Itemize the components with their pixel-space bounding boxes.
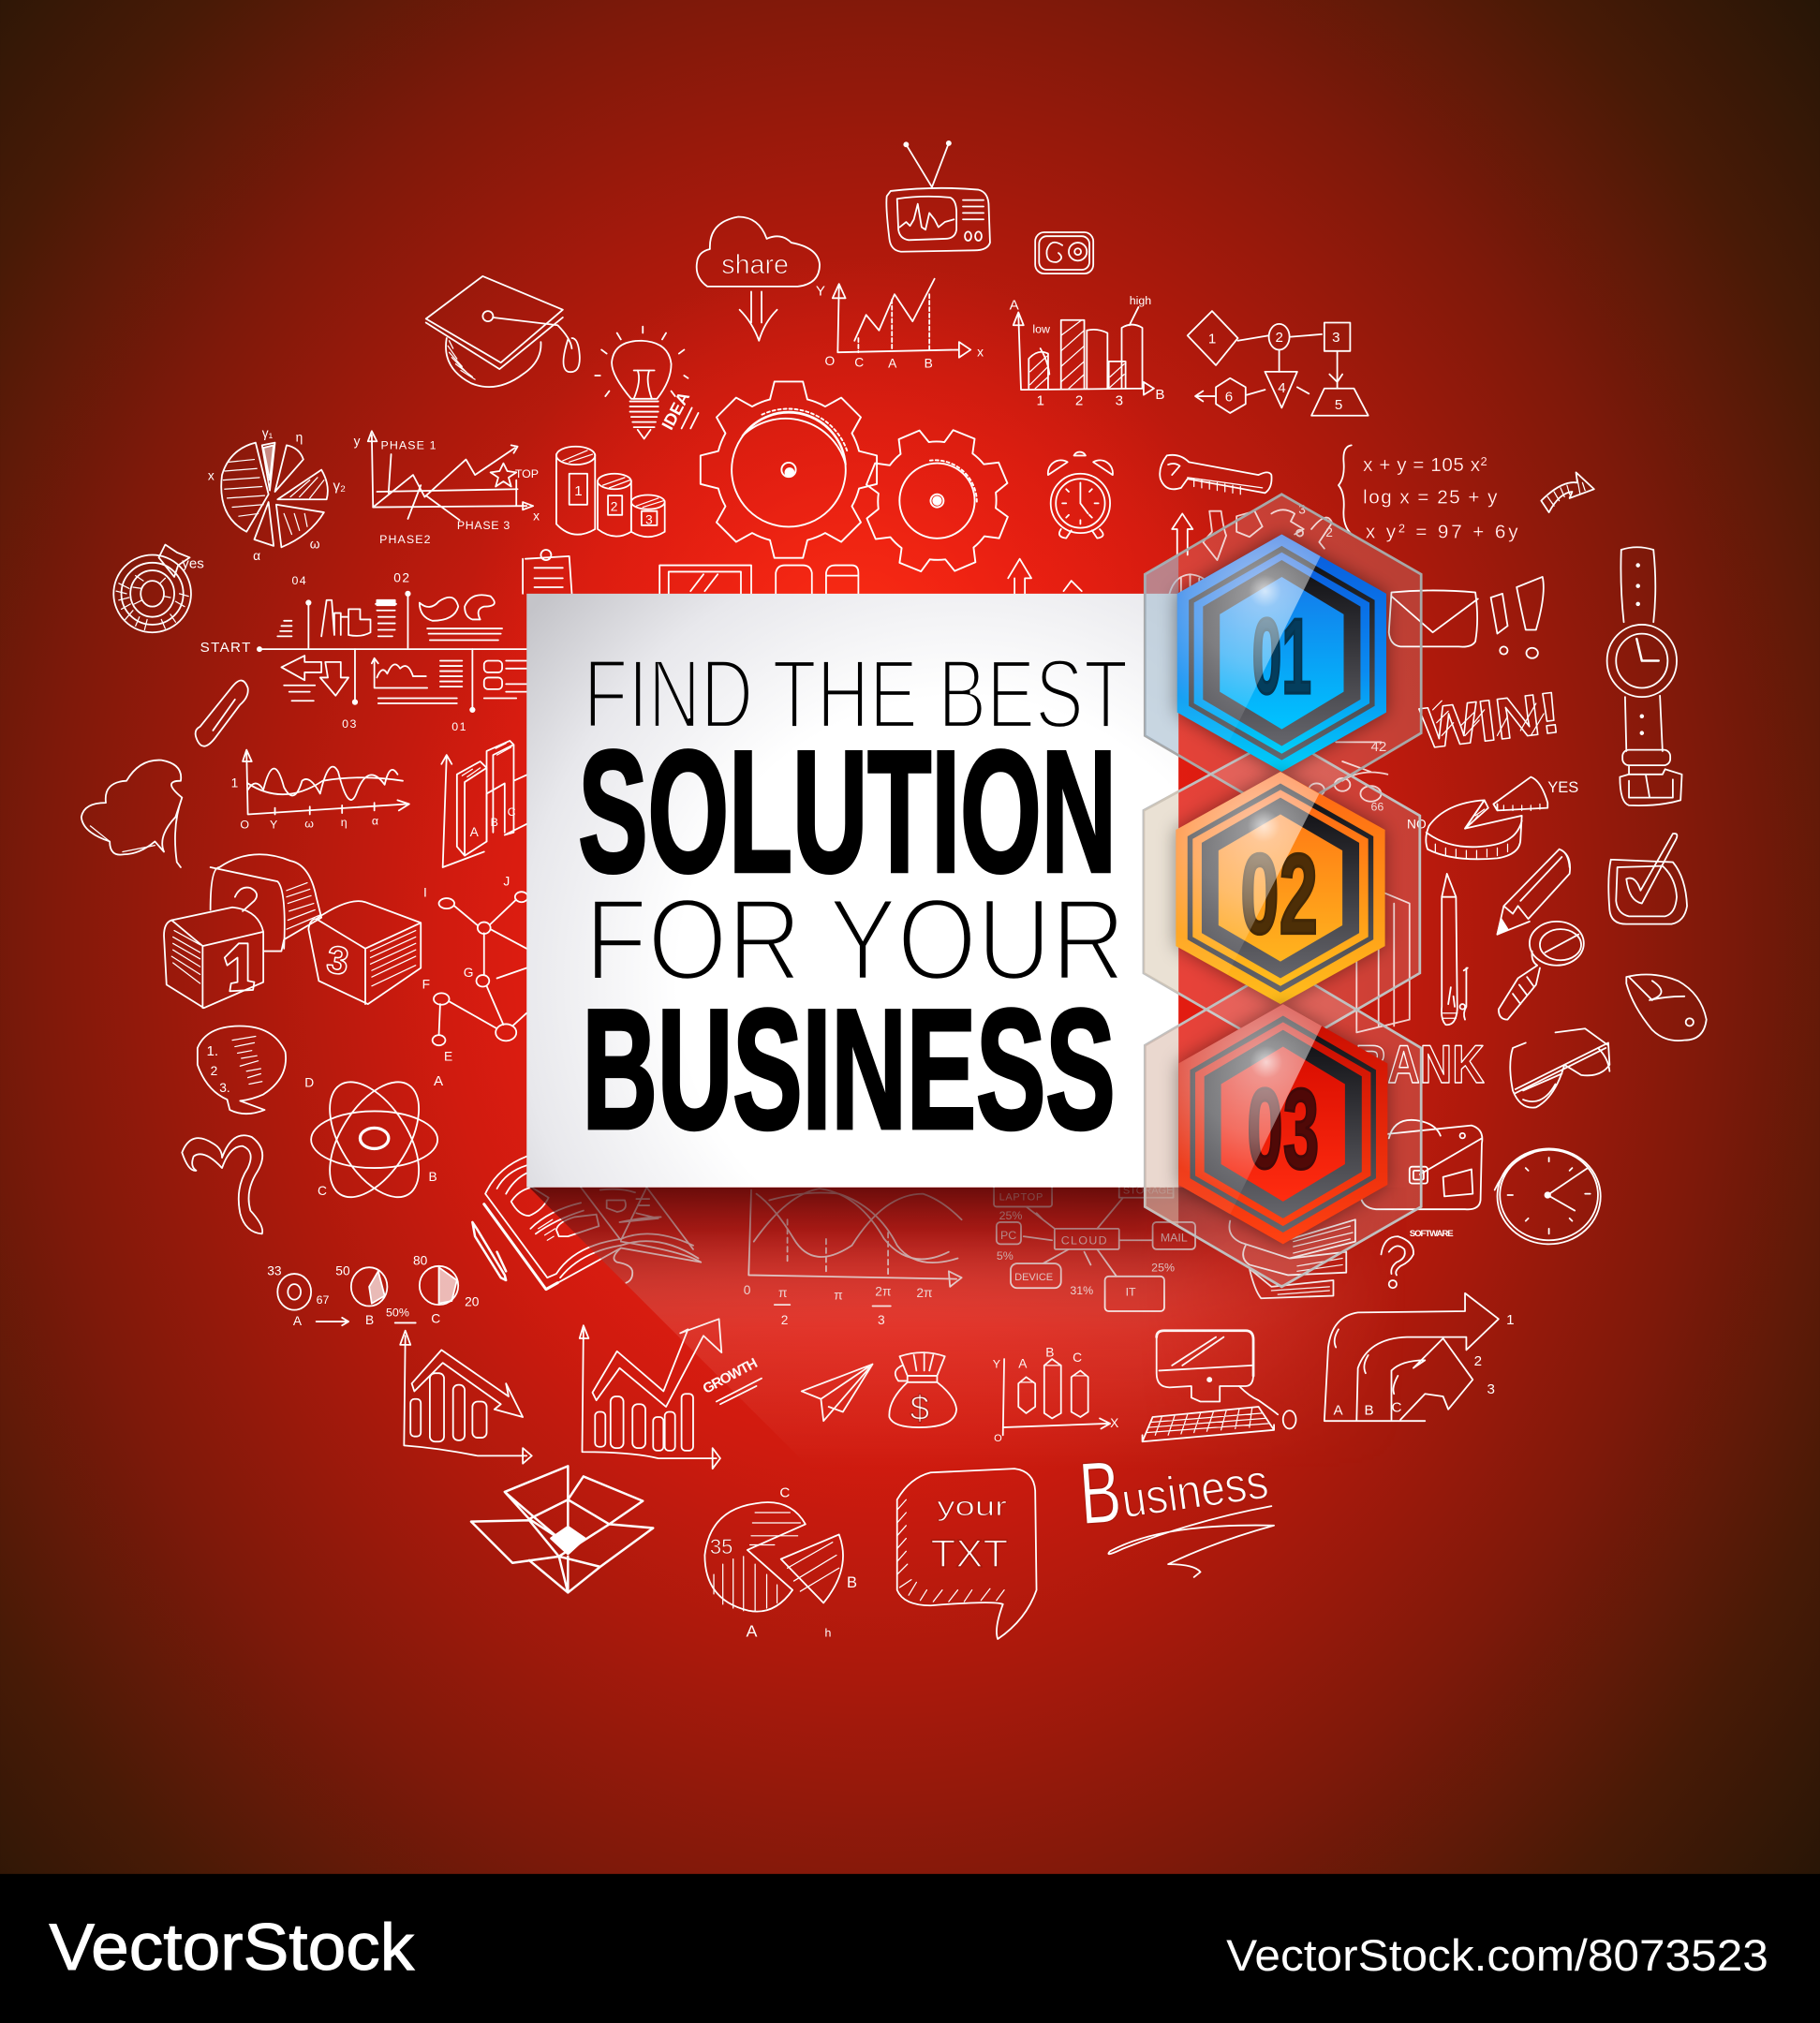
icon: alarm clock: [1048, 452, 1113, 539]
chart: three discs: 20: [465, 1295, 480, 1309]
icon: atom: B: [429, 1170, 437, 1184]
icon: idea light bulb: IDEA: [658, 389, 693, 433]
icon: small gear: [844, 407, 1030, 594]
icon: large gear: [701, 381, 877, 558]
chart: wave line chart: η: [341, 816, 348, 829]
icon: three route arrows ABC: B: [1365, 1402, 1374, 1418]
chart: pie 35: h: [825, 1626, 832, 1639]
icon: tv: [886, 141, 990, 252]
chart: sine curves: [744, 1189, 962, 1327]
chart: wave line chart: [231, 750, 409, 832]
icon: three route arrows ABC: 3: [1487, 1381, 1495, 1397]
chart: bar chart low high: high: [1130, 294, 1151, 307]
icon: three route arrows ABC: 2: [1474, 1353, 1482, 1369]
icon: money bag: $: [910, 1388, 929, 1427]
badge 03: red hexagon: [1178, 1004, 1387, 1244]
chart: ABC column bars: C: [1073, 1351, 1082, 1365]
chart: exploded pie: x: [208, 469, 215, 483]
icon: open book and pencil: [472, 1157, 701, 1290]
chart: bar chart low high: 3: [1116, 393, 1123, 409]
icon: hatched arrow: [1541, 472, 1594, 512]
icon: wall clock: [1495, 1148, 1601, 1244]
glass hexagon panel 3: [1145, 966, 1421, 1287]
icon: pen: [1442, 874, 1468, 1025]
diagram: flowchart 1-6: 6: [1225, 390, 1233, 406]
chart: bar chart low high: 2: [1075, 393, 1083, 409]
glass hexagon panel 1: [1145, 495, 1421, 816]
diagram: flowchart 1-6: 4: [1278, 380, 1286, 396]
chart: wave line chart: α: [372, 815, 378, 828]
chart: sine curves: 2π: [916, 1286, 933, 1300]
chart: sine curves: 0: [744, 1283, 751, 1297]
diagram: flowchart 1-6: [1188, 311, 1369, 416]
chart: three discs: 80: [413, 1253, 428, 1267]
diagram: network nodes: [422, 874, 528, 1089]
icon: atom: C: [318, 1184, 327, 1198]
icon: spiral target yes: [113, 545, 204, 632]
chart: sine curves: 3: [878, 1313, 885, 1327]
chart: ABC column bars: X: [1110, 1416, 1118, 1430]
icon: three route arrows ABC: 1: [1506, 1312, 1515, 1328]
text: math equations: log x = 25 + y: [1363, 486, 1498, 508]
doodles: sketches seen through the glass: 3: [1298, 502, 1306, 516]
chart: bar chart low high: B: [1155, 387, 1164, 403]
icon: pencil: [1497, 849, 1570, 935]
diagram: cloud network: 25%: [999, 1209, 1022, 1222]
heading line: find the best: FIND THE BEST: [584, 640, 1128, 749]
icon: three route arrows ABC: C: [1391, 1400, 1401, 1416]
icon: checkbox: [1608, 834, 1687, 924]
chart: start timeline: START: [200, 640, 252, 656]
chart: falling arrow bars: [400, 1331, 532, 1464]
diagram: network nodes: J: [503, 874, 510, 888]
badge 01: blue hexagon: [1177, 534, 1386, 772]
icon: thought cloud: [81, 760, 182, 867]
icon: curly question shape: [182, 1135, 262, 1233]
chart: line chart ABC: Y: [816, 284, 825, 300]
footer logo text: VectorStock: [49, 1910, 415, 1984]
icon: open box: [471, 1466, 653, 1592]
chart: exploded pie: η: [296, 430, 303, 444]
diagram: cloud network: DEVICE: [1014, 1272, 1053, 1283]
chart: wave line chart: 1: [231, 776, 238, 790]
footer bar: [0, 1874, 1820, 2023]
chart: ABC column bars: A: [1018, 1357, 1028, 1371]
diagram: cloud network: CLOUD: [1061, 1233, 1108, 1247]
icon: share cloud: [697, 217, 820, 341]
text: growth: GROWTH: [701, 1355, 761, 1397]
icon: your txt bubble: TXT: [931, 1532, 1008, 1575]
text: bank: BANK: [1355, 1035, 1485, 1095]
chart: ABC column bars: [993, 1345, 1118, 1444]
chart: exploded pie: [208, 426, 346, 563]
chart: exploded pie: α: [253, 549, 260, 563]
heading line: solution: SOLUTION: [578, 716, 1117, 908]
icon: share cloud: share: [721, 250, 789, 280]
text: win: WIN!: [1417, 681, 1563, 761]
icon: numbered cylinders: [556, 447, 665, 537]
icon: paperclip: [196, 681, 248, 746]
chart: start timeline: 04: [291, 574, 307, 587]
icon: envelope and exclamations: [1389, 577, 1544, 658]
number 02: 02: [1240, 830, 1318, 957]
chart: bar chart low high: 1: [1037, 393, 1044, 409]
chart: rising arrow bars: [580, 1319, 721, 1469]
icon: glasses: [1510, 1028, 1609, 1108]
doodles: sketches seen through the glass: 2: [1325, 525, 1333, 539]
chart: ABC column bars: Y: [993, 1358, 1000, 1371]
icon: atom: D: [304, 1075, 314, 1089]
diagram: cloud network: LAPTOP: [999, 1192, 1043, 1203]
chart: 3D pie yes no: NO: [1407, 818, 1427, 832]
text: business with swoosh: B: [1076, 1442, 1124, 1543]
diagram: cloud network: STORAGE: [1123, 1186, 1174, 1197]
chart: line chart ABC: A: [888, 357, 897, 371]
chart: three discs: 50: [335, 1263, 350, 1277]
heading line: business: BUSINESS: [582, 973, 1116, 1164]
icon: paper plane: [802, 1365, 873, 1421]
diagram: network nodes: E: [444, 1050, 452, 1064]
chart: phase line chart: PHASE 3: [457, 519, 510, 532]
chart: line chart ABC: O: [825, 354, 836, 368]
badge 01: blue hexagon: 01: [1252, 597, 1311, 716]
chart: phase line chart: [354, 431, 540, 546]
chart: line chart ABC: [816, 279, 984, 371]
long card shadow: [529, 1188, 1391, 1425]
diagram: cloud network: [994, 1181, 1195, 1311]
text: business with swoosh: usiness: [1118, 1454, 1271, 1528]
chart: wave line chart: ω: [304, 817, 314, 830]
chart: pie 35: B: [847, 1573, 857, 1591]
chart: three discs: 33: [267, 1263, 282, 1277]
chart: bar chart low high: [1010, 294, 1164, 409]
icon: briefcase: [1360, 1120, 1482, 1209]
diagram: flowchart 1-6: 2: [1275, 330, 1283, 346]
icon: magnifying glass: [1499, 922, 1584, 1020]
diagram: flowchart 1-6: 5: [1335, 397, 1342, 413]
chart: start timeline: 03: [342, 717, 358, 731]
diagram: cloud network: 25%: [1151, 1261, 1175, 1274]
doodles: partly hidden sketches above the card: [523, 513, 1192, 594]
icon: numbered cylinders: 3: [645, 512, 653, 526]
chart: 3D pie yes no: YES: [1547, 778, 1578, 796]
icon: your txt bubble: your: [937, 1492, 1007, 1522]
diagram: network nodes: G: [464, 966, 473, 980]
diagram: cloud network: MAIL: [1161, 1232, 1188, 1245]
chart: exploded pie: ω: [310, 538, 320, 552]
chart: wave line chart: O: [240, 819, 249, 832]
doodles: sketches seen through the glass: 66: [1370, 800, 1383, 813]
panel: headline card: [526, 594, 1178, 1188]
icon: numbered speech bubble: 3.: [219, 1081, 230, 1095]
icon: question mark software: [1381, 1229, 1454, 1288]
diagram: network nodes: A: [434, 1073, 444, 1089]
doodles: hand-drawn business sketches: [81, 141, 1707, 1640]
chart: phase line chart: PHASE2: [379, 533, 432, 546]
chart: three discs: C: [431, 1311, 440, 1325]
chart: three discs: [267, 1253, 480, 1328]
chart: line chart ABC: x: [977, 345, 984, 359]
chart: pie 35: C: [779, 1484, 790, 1500]
chart: exploded pie: γ₁: [262, 426, 274, 440]
diagram: cloud network: IT: [1126, 1286, 1136, 1299]
chart: pie 35: 35: [710, 1535, 732, 1558]
diagram: flowchart 1-6: 1: [1208, 332, 1216, 347]
icon: computer mouse: [1626, 974, 1707, 1041]
text: math equations: x y² = 97 + 6y: [1366, 522, 1518, 543]
chart: ABC column bars: B: [1045, 1345, 1054, 1359]
icon: numbered speech bubble: 1.: [206, 1043, 218, 1059]
chart: three discs: 67: [317, 1293, 330, 1307]
chart: 3D bars ABCD: B: [491, 816, 498, 829]
icon: wrench: [1160, 455, 1272, 495]
chart: 3D bars ABCD: [441, 741, 528, 867]
chart: sine curves: π: [834, 1289, 843, 1303]
chart: sine curves: π: [778, 1286, 787, 1300]
chart: sine curves: 2: [781, 1313, 788, 1327]
diagram: flowchart 1-6: 3: [1332, 330, 1340, 346]
text: math equations: x + y = 105 x²: [1363, 454, 1487, 476]
icon: desktop computer: [1143, 1331, 1296, 1441]
chart: pie 35: [704, 1484, 857, 1640]
icon: idea light bulb: [595, 327, 699, 439]
chart: 3D bars ABCD: A: [470, 825, 480, 839]
diagram: cloud network: PC: [1000, 1229, 1016, 1242]
icon: numbered cubes 1 2 3: 3: [324, 938, 351, 983]
diagram: network nodes: I: [423, 886, 427, 900]
chart: start timeline: 01: [451, 720, 467, 733]
doodles: sketches seen through the glass: 42: [1370, 739, 1386, 755]
chart: sine curves: 2π: [875, 1285, 891, 1299]
chart: bar chart low high: low: [1032, 323, 1050, 336]
chart: wave line chart: Y: [270, 819, 277, 832]
chart: bar chart low high: A: [1010, 298, 1020, 314]
chart: exploded pie: γ₂: [333, 479, 346, 495]
badge 02: orange hexagon: [1176, 772, 1385, 1004]
chart: ABC column bars: O: [994, 1433, 1002, 1444]
chart: 3D pie yes no: [1407, 777, 1578, 859]
icon: atom: [304, 1067, 437, 1212]
diagram: cloud network: 31%: [1070, 1284, 1093, 1297]
icon: question mark software: SOFTWARE: [1410, 1229, 1454, 1239]
text: math equations: [1339, 445, 1518, 543]
heading line: for your: FOR YOUR: [584, 876, 1126, 1005]
icon: graduation cap: [426, 276, 580, 387]
chart: 3D bars ABCD: C: [508, 805, 516, 819]
glass hexagon panel 2: [1144, 735, 1420, 1053]
text: business with swoosh: [1076, 1442, 1274, 1577]
chart: three discs: A: [293, 1314, 303, 1328]
icon: three route arrows ABC: A: [1333, 1402, 1343, 1418]
icon: numbered speech bubble: [198, 1026, 286, 1114]
chart: phase line chart: y: [354, 434, 361, 448]
icon: wristwatch: [1607, 547, 1682, 805]
chart: start timeline: [200, 570, 526, 733]
icon: numbered cylinders: 2: [611, 500, 617, 514]
chart: three discs: 50%: [386, 1307, 409, 1320]
icon: numbered cylinders: 1: [574, 483, 583, 499]
icon: stacked books: [1229, 1219, 1355, 1298]
chart: phase line chart: x: [533, 509, 540, 523]
icon: spiral target yes: yes: [182, 555, 204, 571]
chart: start timeline: 02: [393, 570, 410, 584]
chart: phase line chart: PHASE 1: [381, 439, 437, 452]
icon: your txt bubble: [897, 1469, 1037, 1639]
number 03: 03: [1247, 1065, 1319, 1192]
chart: phase line chart: TOP: [515, 467, 539, 480]
icon: numbered cubes 1 2 3: [164, 854, 421, 1008]
icon: three route arrows ABC: [1324, 1293, 1515, 1421]
chart: pie 35: A: [746, 1621, 757, 1640]
icon: go button: [1035, 232, 1093, 273]
icon: numbered speech bubble: 2: [211, 1064, 217, 1078]
diagram: cloud network: 5%: [997, 1249, 1014, 1263]
footer image id text: VectorStock.com/8073523: [1226, 1931, 1768, 1980]
chart: line chart ABC: B: [925, 357, 933, 371]
icon: money bag: [889, 1352, 956, 1427]
diagram: network nodes: F: [422, 978, 430, 992]
chart: three discs: B: [365, 1313, 374, 1327]
chart: line chart ABC: C: [854, 355, 864, 369]
doodles: sketches seen through the glass: [1169, 502, 1410, 1032]
